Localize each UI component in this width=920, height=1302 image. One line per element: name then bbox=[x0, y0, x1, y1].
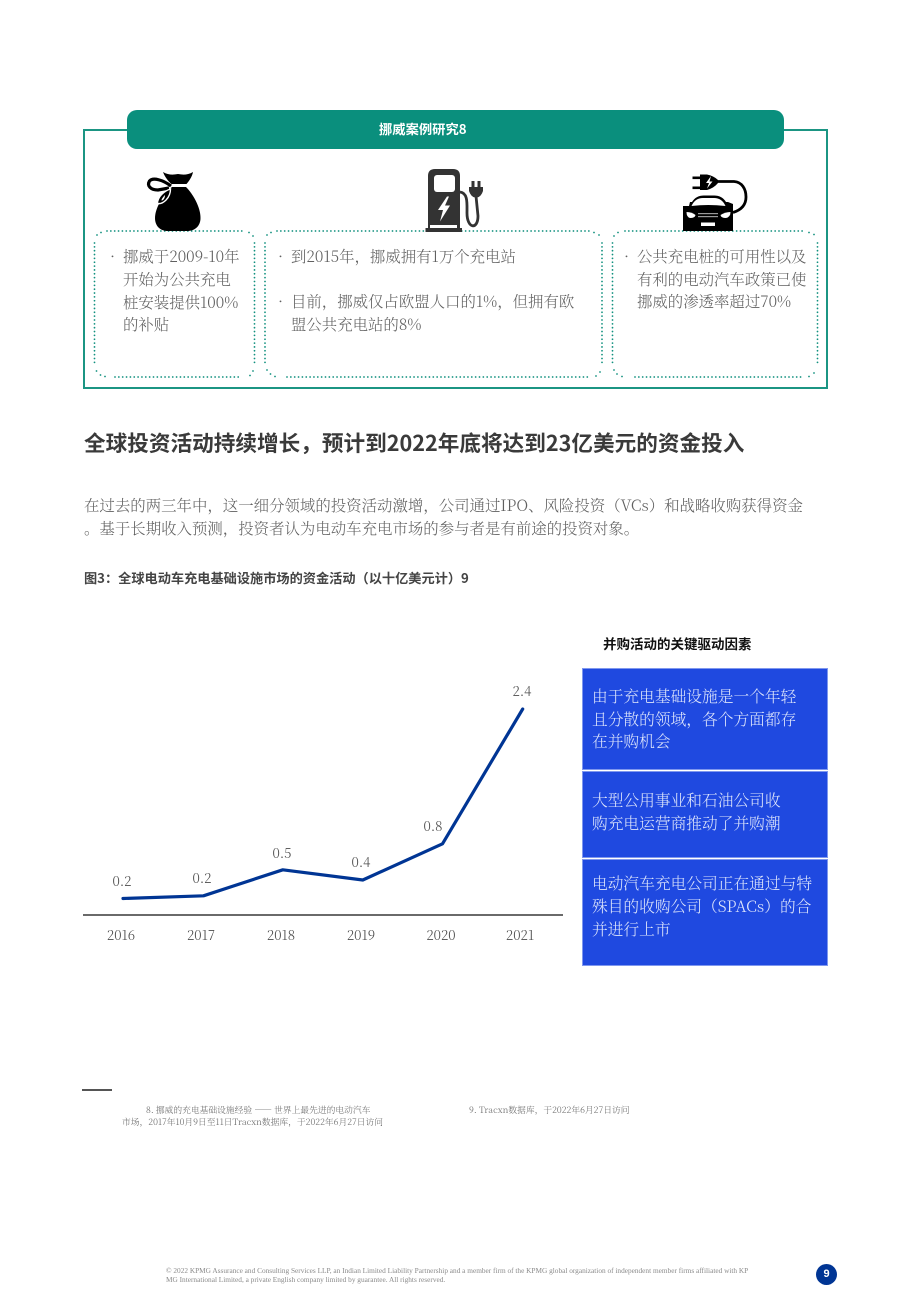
text block: charging stations: 到2015年，挪威拥有1万个充电站 bbox=[291, 245, 516, 267]
intro paragraph bbox=[84, 494, 803, 539]
footnote 8: 8. 挪威的充电基础设施经验 —— 世界上最先进的电动汽车 bbox=[146, 1103, 370, 1116]
text block: subsidy: 的补贴 bbox=[123, 313, 169, 335]
line chart: funding activity 2016-2021 bbox=[83, 681, 563, 944]
footnote 9: 9. Tracxn数据库，于2022年6月27日访问 bbox=[469, 1103, 629, 1116]
panel: driver 2 bbox=[582, 771, 828, 858]
copyright footer bbox=[166, 1266, 748, 1284]
panel: driver 3: 殊目的收购公司（SPACs）的合 bbox=[592, 895, 811, 917]
text block: subsidy: · bbox=[110, 245, 115, 267]
panel: driver 3: 并进行上市 bbox=[592, 918, 671, 940]
icon: money bag bbox=[146, 172, 200, 231]
text block: subsidy bbox=[110, 245, 240, 335]
line chart: funding activity 2016-2021: 0.2 bbox=[193, 868, 211, 887]
text block: charging stations: · bbox=[278, 245, 283, 267]
line chart: funding activity 2016-2021: 2.4 bbox=[513, 681, 531, 700]
text block: subsidy: 挪威于2009-10年 bbox=[123, 245, 240, 267]
page number badge bbox=[816, 1264, 837, 1285]
text block: penetration: 公共充电桩的可用性以及 bbox=[637, 245, 806, 267]
text block: charging stations: 盟公共充电站的8% bbox=[291, 313, 421, 335]
section heading: 全球投资活动持续增长，预计到2022年底将达到23亿美元的资金投入 bbox=[84, 427, 744, 458]
text block: penetration: · bbox=[624, 245, 629, 267]
line chart: funding activity 2016-2021: 0.5 bbox=[273, 843, 291, 862]
text block: charging stations: · bbox=[278, 290, 283, 312]
panel: driver 2: 大型公用事业和石油公司收 bbox=[592, 789, 781, 811]
panel: Norway case study frame bbox=[83, 129, 828, 389]
page number badge: 9 bbox=[823, 1268, 830, 1280]
line chart: funding activity 2016-2021: 2017 bbox=[187, 925, 215, 944]
text block: penetration: 有利的电动汽车政策已使 bbox=[637, 268, 806, 290]
panel: driver 3 bbox=[582, 859, 828, 966]
line chart: funding activity 2016-2021: 0.2 bbox=[113, 871, 131, 890]
panel: driver 2: 购充电运营商推动了并购潮 bbox=[592, 812, 781, 834]
dotted text box outlines bbox=[94, 230, 818, 378]
text block: subsidy: 桩安装提供100% bbox=[123, 291, 238, 313]
icon: electric car with plug bbox=[683, 174, 748, 231]
heading banner: Norway case study: 挪威案例研究8 bbox=[379, 119, 467, 138]
text block: charging stations bbox=[278, 245, 574, 335]
line chart: funding activity 2016-2021: 2019 bbox=[347, 925, 375, 944]
panel: driver 3: 电动汽车充电公司正在通过与特 bbox=[592, 872, 812, 894]
heading banner: Norway case study bbox=[127, 110, 784, 149]
panel: driver 1: 且分散的领域，各个方面都存 bbox=[592, 708, 796, 730]
heading: M&A drivers: 并购活动的关键驱动因素 bbox=[603, 633, 752, 653]
line chart: funding activity 2016-2021: 2020 bbox=[426, 925, 456, 944]
icon: charging pump bbox=[426, 169, 483, 232]
line chart: funding activity 2016-2021: 0.4 bbox=[352, 852, 370, 871]
panel: driver 1: 在并购机会 bbox=[592, 730, 671, 752]
copyright footer: © 2022 KPMG Assurance and Consulting Services LLP, an Indian Limited Liability Partnership and a member firm of the KPMG global organization of independent member firms affiliated with KP bbox=[166, 1266, 748, 1275]
line chart: funding activity 2016-2021: 2021 bbox=[506, 925, 534, 944]
text block: penetration bbox=[624, 245, 806, 312]
footnote 8 bbox=[122, 1103, 383, 1128]
intro paragraph: 。基于长期收入预测，投资者认为电动车充电市场的参与者是有前途的投资对象。 bbox=[84, 517, 639, 539]
line chart: funding activity 2016-2021: 2016 bbox=[107, 925, 135, 944]
intro paragraph: 在过去的两三年中，这一细分领域的投资活动激增，公司通过IPO、风险投资（VCs）和战略收购获得资金 bbox=[84, 494, 803, 516]
line chart: funding activity 2016-2021: 0.8 bbox=[424, 816, 442, 835]
copyright footer: MG International Limited, a private English company limited by guarantee. All rights reserved. bbox=[166, 1275, 445, 1284]
panel: driver 1: 由于充电基础设施是一个年轻 bbox=[592, 685, 796, 707]
footnote 8: 市场，2017年10月9日至11日Tracxn数据库，于2022年6月27日访问 bbox=[122, 1114, 383, 1128]
panel: driver 1 bbox=[582, 668, 828, 770]
text block: penetration: 挪威的渗透率超过70% bbox=[637, 290, 791, 312]
figure caption: 图3：全球电动车充电基础设施市场的资金活动（以十亿美元计）9 bbox=[84, 568, 469, 586]
line chart: funding activity 2016-2021: 2018 bbox=[267, 925, 295, 944]
text block: charging stations: 目前，挪威仅占欧盟人口的1%，但拥有欧 bbox=[291, 290, 574, 312]
text block: subsidy: 开始为公共充电 bbox=[123, 268, 231, 290]
